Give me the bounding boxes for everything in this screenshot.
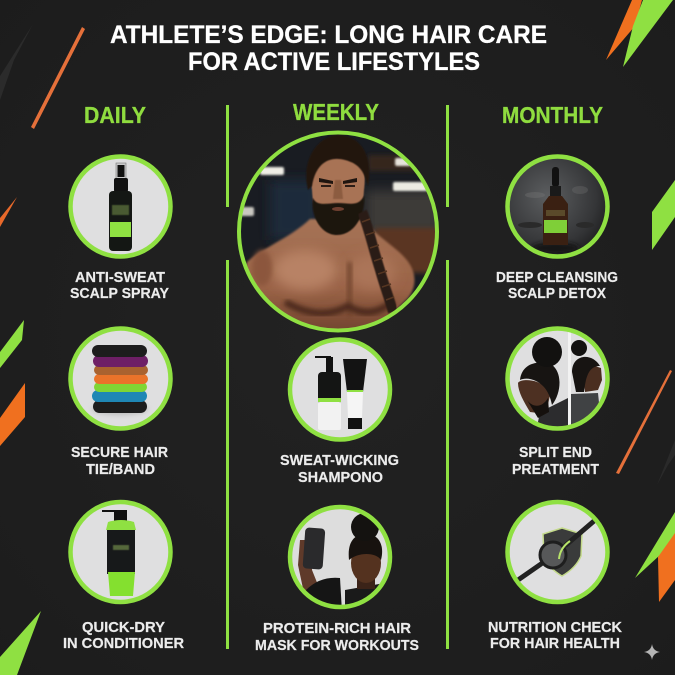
icon: split end treatment portraits: [508, 328, 608, 438]
label: nutrition check for hair health: FOR HAIR HEALTH: [490, 635, 620, 652]
label: quick-dry in conditioner: QUICK-DRY: [82, 619, 165, 636]
title: ATHLETE’S EDGE: LONG HAIR CARE: [110, 21, 547, 49]
label: anti-sweat scalp spray: ANTI-SWEAT: [75, 269, 165, 286]
icon: scalp detox dropper bottle: [508, 156, 608, 256]
decorative slashes left: [0, 24, 85, 675]
heading: weekly: WEEKLY: [293, 99, 379, 125]
title: FOR ACTIVE LIFESTYLES: [188, 48, 480, 76]
label: split end treatment: PREATMENT: [512, 461, 599, 478]
label: deep cleansing scalp detox: [496, 269, 618, 302]
label: sweat-wicking shampoo: SHAMPONO: [298, 469, 383, 486]
column dividers: [226, 105, 449, 649]
decorative slashes right: [606, 0, 675, 602]
label: nutrition check for hair health: [488, 619, 622, 652]
label: secure hair tie/band: [71, 444, 168, 478]
label: sweat-wicking shampoo: [280, 452, 399, 486]
label: nutrition check for hair health: NUTRITION CHECK: [488, 619, 622, 636]
icon: anti-sweat spray bottle: [70, 156, 170, 256]
label: deep cleansing scalp detox: DEEP CLEANSING: [496, 269, 618, 286]
label: secure hair tie/band: SECURE HAIR: [71, 444, 168, 461]
label: deep cleansing scalp detox: SCALP DETOX: [508, 285, 606, 302]
label: quick-dry in conditioner: IN CONDITIONER: [63, 635, 184, 652]
label: secure hair tie/band: TIE/BAND: [86, 461, 155, 478]
icon: athlete with shaker: [290, 507, 395, 612]
icon: sparkle mark: [644, 644, 660, 660]
icon: hair ties: [70, 328, 170, 428]
icon: shampoo and tube: [290, 340, 390, 440]
label: sweat-wicking shampoo: SWEAT-WICKING: [280, 452, 399, 469]
label: protein-rich hair mask: MASK FOR WORKOUTS: [255, 637, 419, 654]
title: [110, 21, 547, 76]
heading: monthly: MONTHLY: [502, 102, 603, 128]
label: anti-sweat scalp spray: [70, 269, 169, 302]
label: split end treatment: [512, 444, 599, 478]
label: quick-dry in conditioner: [63, 619, 184, 652]
photo: athlete with long braided hair: [235, 130, 440, 335]
heading: daily: DAILY: [84, 102, 146, 128]
icon: shield with magnifier: [508, 502, 608, 602]
label: split end treatment: SPLIT END: [519, 444, 592, 461]
label: protein-rich hair mask: PROTEIN-RICH HAIR: [263, 620, 411, 637]
icon: quick-dry conditioner bottle: [70, 502, 170, 602]
label: protein-rich hair mask: [255, 620, 419, 654]
label: anti-sweat scalp spray: SCALP SPRAY: [70, 285, 169, 302]
